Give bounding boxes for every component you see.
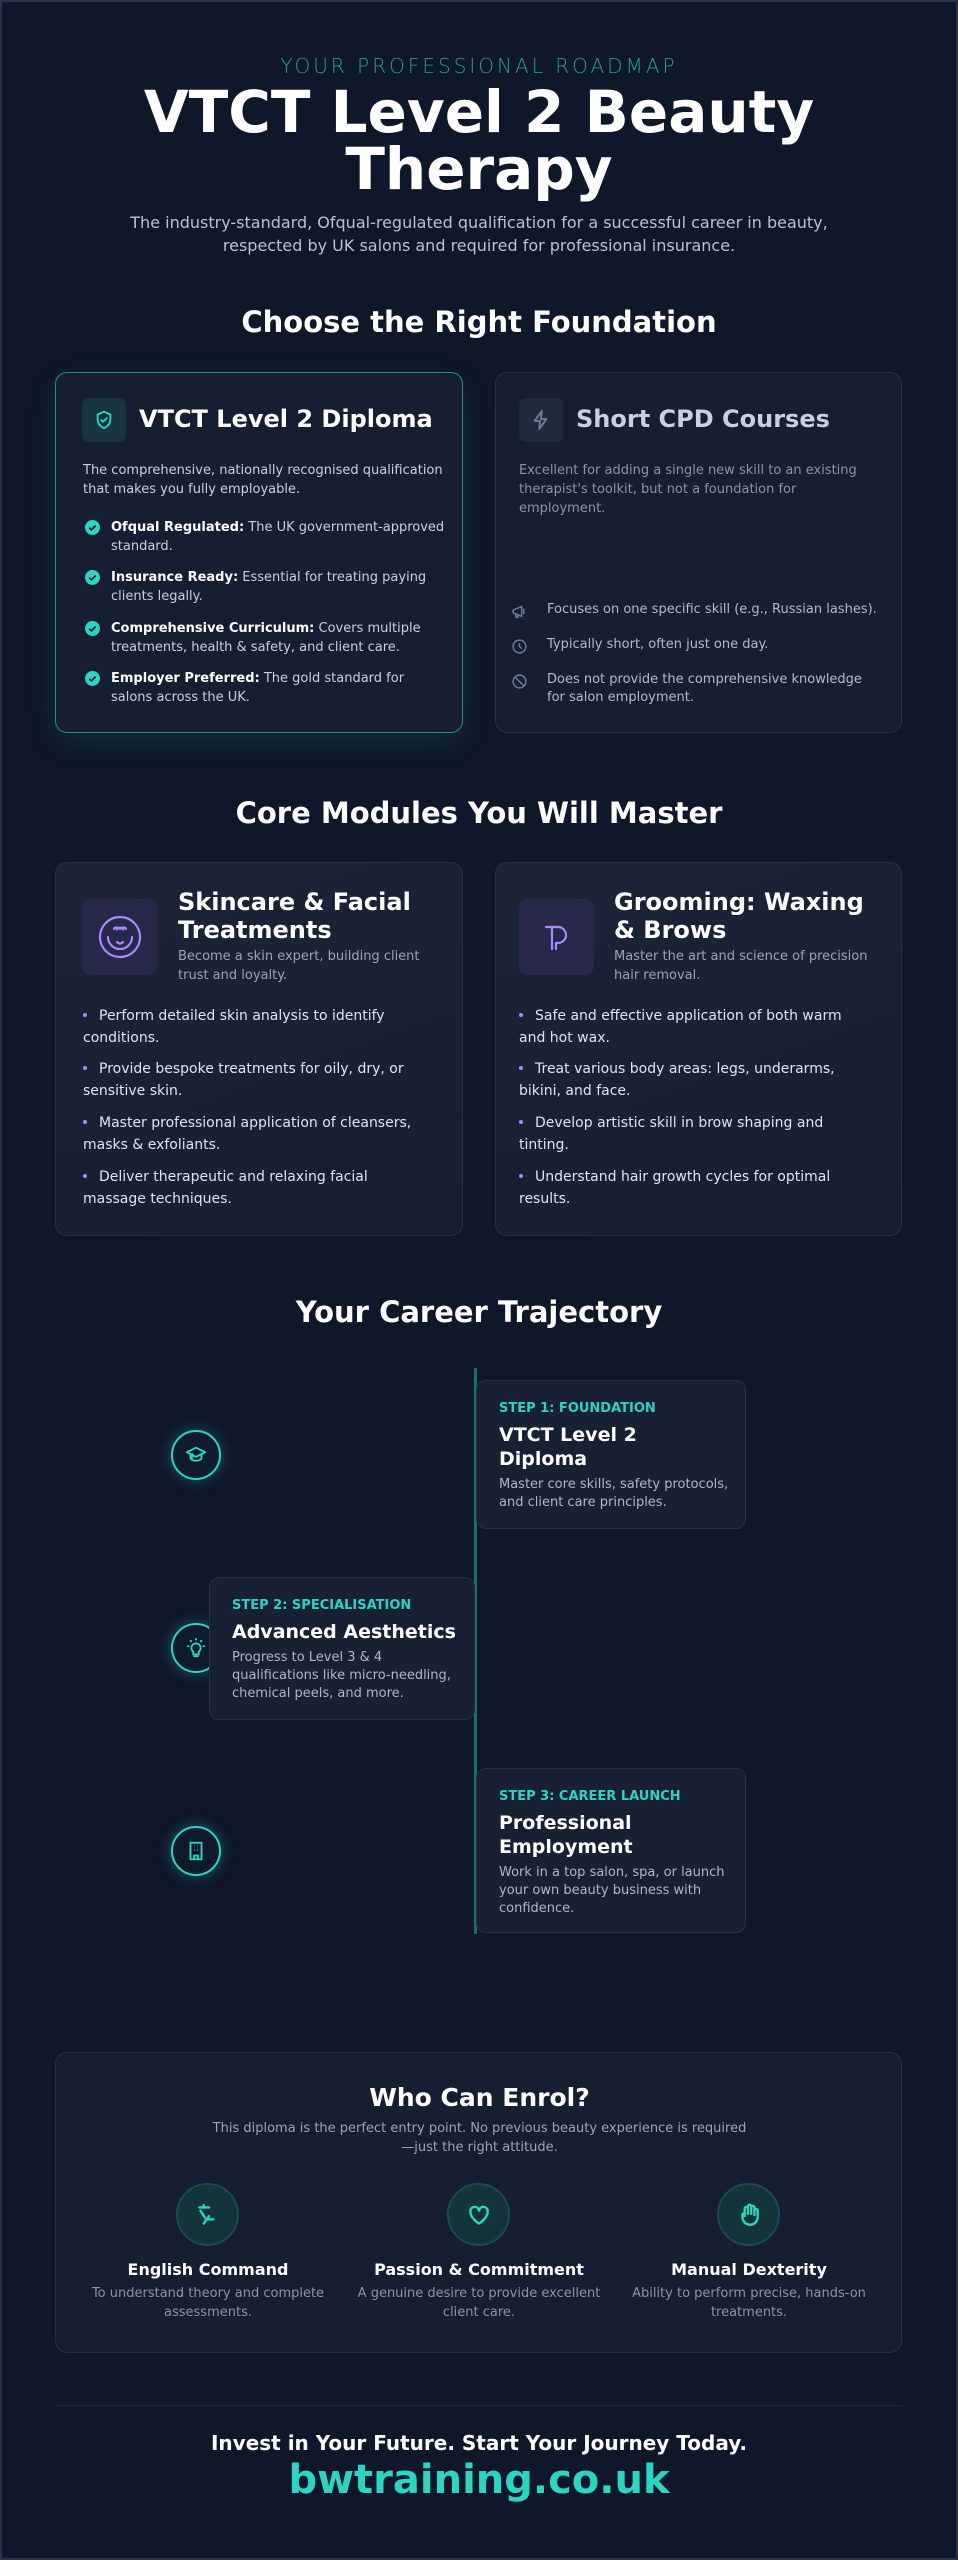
benefit list <box>85 520 444 705</box>
step 1 card: and client care principles. <box>499 1495 667 1510</box>
icon: shield check <box>82 398 126 442</box>
step 3 card <box>476 1768 746 1933</box>
module subtitle: hair removal. <box>614 968 700 982</box>
module bullets <box>83 1008 411 1207</box>
requirement: Dexterity: treatments. <box>711 2305 787 2320</box>
item: not comprehensive: for salon employment. <box>547 690 694 705</box>
heading: Choose the Right Foundation: Choose the Right Foundation <box>241 305 717 339</box>
heading: Career Trajectory: Your Career Trajectory <box>296 1295 662 1329</box>
title: VTCT Level 2 Beauty <box>144 78 814 146</box>
step 3 card: Employment <box>499 1836 633 1858</box>
step 2 card: Advanced Aesthetics <box>232 1621 456 1643</box>
requirement: Dexterity <box>632 2183 866 2320</box>
benefit: Ofqual: standard. <box>111 539 173 554</box>
icon: lightning <box>519 398 563 442</box>
module title: & Brows <box>614 916 726 944</box>
module bullets <box>519 1008 842 1207</box>
icon: hand <box>717 2183 780 2246</box>
card description: employment. <box>519 501 605 516</box>
step 2 card <box>209 1577 475 1720</box>
subtitle <box>130 213 828 255</box>
module bullets: Understand hair growth cycles for optimal <box>535 1169 830 1185</box>
benefit: Employer: Employer Preferred: The gold standard for <box>111 671 404 686</box>
step 1 card: STEP 1: FOUNDATION <box>499 1401 656 1416</box>
item: not comprehensive <box>512 672 862 705</box>
requirement: English <box>92 2183 324 2320</box>
title <box>144 78 814 203</box>
call to action: Invest in Your Future. Start Your Journey Today. <box>211 2431 747 2455</box>
icon: translate <box>176 2183 239 2246</box>
icon: graduation cap <box>171 1430 221 1480</box>
icon: heart <box>447 2183 510 2246</box>
benefit: Insurance: clients legally. <box>111 589 203 604</box>
module bullets: and hot wax. <box>519 1030 610 1046</box>
step 3 card: your own beauty business with <box>499 1883 701 1898</box>
requirement: Passion: Passion & Commitment <box>374 2260 584 2279</box>
module subtitle: trust and loyalty. <box>178 968 287 982</box>
step 3 card: Professional <box>499 1812 632 1834</box>
step 1 card <box>476 1380 746 1529</box>
step 2 card: Progress to Level 3 & 4 <box>232 1650 382 1665</box>
requirement: Dexterity: Ability to perform precise, hands-on <box>632 2286 866 2301</box>
icon: smiley face <box>82 899 157 975</box>
benefit: Ofqual: Ofqual Regulated: The UK government-approved <box>111 520 444 535</box>
step 1 card: Master core skills, safety protocols, <box>499 1477 728 1492</box>
card description <box>82 463 443 497</box>
step 3 card: STEP 3: CAREER LAUNCH <box>499 1789 681 1804</box>
card description <box>519 463 857 516</box>
panel: Skincare module <box>55 862 463 1236</box>
benefit: Curriculum: treatments, health & safety, and client care. <box>111 640 400 655</box>
module bullets: results. <box>519 1191 570 1207</box>
step 3 card: confidence. <box>499 1901 574 1916</box>
requirement: Dexterity: Manual Dexterity <box>671 2260 827 2279</box>
requirement: Passion <box>358 2183 600 2320</box>
subtitle: respected by UK salons and required for professional insurance. <box>223 236 735 255</box>
requirement: English: English Command <box>128 2260 288 2279</box>
card title: Short CPD Courses <box>576 405 830 433</box>
module title <box>178 888 411 944</box>
module bullets: bikini, and face. <box>519 1083 630 1099</box>
panel: Who Can Enrol <box>55 2052 902 2353</box>
requirement: Passion: client care. <box>443 2305 515 2320</box>
module bullets: conditions. <box>83 1030 159 1046</box>
module bullets: Develop artistic skill in brow shaping and <box>535 1115 823 1131</box>
benefit: Curriculum: Comprehensive Curriculum: Covers multiple <box>111 621 421 636</box>
module bullets: Provide bespoke treatments for oily, dry, or <box>99 1061 404 1077</box>
module bullets: masks & exfoliants. <box>83 1137 220 1153</box>
item: not comprehensive: Does not provide the comprehensive knowledge <box>547 672 862 687</box>
item: single skill: Focuses on one specific skill (e.g., Russian lashes). <box>547 602 877 617</box>
requirement: English: To understand theory and complete <box>92 2286 324 2301</box>
card description: therapist's toolkit, but not a foundation for <box>519 482 796 497</box>
panel: VTCT Level 2 Diploma <box>55 372 463 733</box>
module bullets: Treat various body areas: legs, underarms, <box>535 1061 835 1077</box>
benefit: Curriculum <box>85 621 421 655</box>
module title <box>614 888 864 944</box>
panel: Grooming module <box>495 862 902 1236</box>
card description: that makes you fully employable. <box>83 482 300 497</box>
module subtitle <box>178 949 420 982</box>
step 1 card: Diploma <box>499 1448 587 1470</box>
benefit: Insurance <box>85 570 426 604</box>
card description: Excellent for adding a single new skill to an existing <box>519 463 857 478</box>
step 2 card: qualifications like micro-needling, <box>232 1668 451 1683</box>
module bullets: Deliver therapeutic and relaxing facial <box>99 1169 368 1185</box>
enrol description: —just the right attitude. <box>401 2140 558 2155</box>
module subtitle: Master the art and science of precision <box>614 949 867 964</box>
step 2 card: chemical peels, and more. <box>232 1686 404 1701</box>
module bullets: tinting. <box>519 1137 569 1153</box>
benefit: Ofqual <box>85 520 444 554</box>
module title: Treatments <box>178 916 332 944</box>
item: short: Typically short, often just one day. <box>547 637 768 652</box>
benefit: Employer <box>85 671 404 705</box>
icon: lightbulb <box>171 1623 221 1673</box>
icon: grooming <box>519 899 594 975</box>
enrol description: This diploma is the perfect entry point. No previous beauty experience is required <box>213 2121 746 2136</box>
requirement: English: assessments. <box>164 2305 252 2320</box>
enrol description <box>212 2121 746 2155</box>
module title: Grooming: Waxing <box>614 888 864 916</box>
module bullets: Safe and effective application of both warm <box>535 1008 842 1024</box>
module title: Skincare & Facial <box>178 888 411 916</box>
panel: Short CPD Courses <box>495 372 902 733</box>
card description: The comprehensive, nationally recognised qualification <box>83 463 443 478</box>
module subtitle: Become a skin expert, building client <box>178 949 420 964</box>
step 1 card: VTCT Level 2 <box>499 1424 637 1446</box>
benefit: Insurance: Insurance Ready: Essential for treating paying <box>111 570 426 585</box>
step 2 card: STEP 2: SPECIALISATION <box>232 1598 411 1613</box>
step 3 card: Work in a top salon, spa, or launch <box>499 1865 725 1880</box>
module bullets: Master professional application of cleansers, <box>99 1115 411 1131</box>
card title: VTCT Level 2 Diploma <box>139 405 433 433</box>
benefit: Employer: salons across the UK. <box>111 690 250 705</box>
module bullets: Perform detailed skin analysis to identify <box>99 1008 385 1024</box>
title: Therapy <box>345 135 613 203</box>
module subtitle <box>614 949 867 982</box>
eyebrow label: YOUR PROFESSIONAL ROADMAP <box>280 54 678 78</box>
heading: Core Modules: Core Modules You Will Master <box>236 796 722 830</box>
requirement: Passion: A genuine desire to provide excellent <box>358 2286 600 2301</box>
subtitle: The industry-standard, Ofqual-regulated qualification for a successful career in beauty, <box>130 213 828 232</box>
enrol title: Who Can Enrol? <box>369 2083 590 2112</box>
icon: building <box>171 1826 221 1876</box>
limitation list <box>512 602 877 705</box>
timeline line <box>474 1368 477 1934</box>
module bullets: massage techniques. <box>83 1191 232 1207</box>
website url: bwtraining.co.uk <box>288 2457 670 2503</box>
module bullets: sensitive skin. <box>83 1083 182 1099</box>
